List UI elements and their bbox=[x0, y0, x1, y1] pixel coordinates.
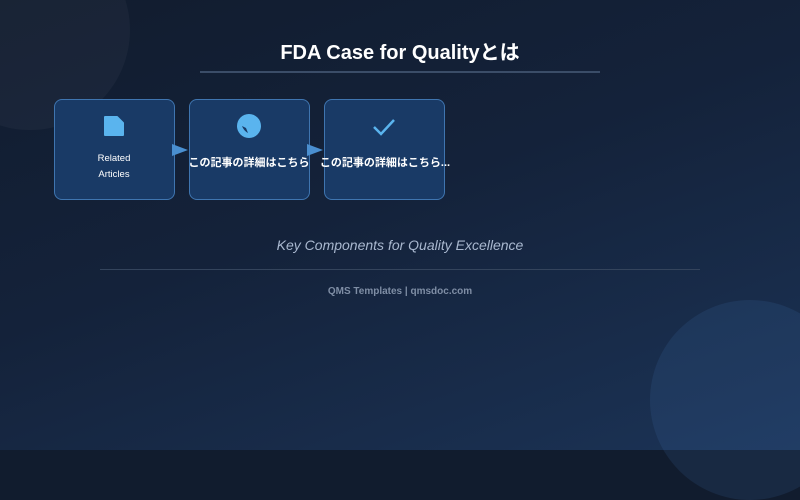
card: related articles bbox=[54, 99, 175, 200]
footer: QMS Templates | qmsdoc.com bbox=[328, 286, 472, 297]
card: 2 bbox=[189, 99, 310, 200]
arrow 1 bbox=[172, 144, 188, 156]
card: 3: この記事の詳細はこちら... bbox=[320, 157, 450, 169]
card: related articles: Related bbox=[98, 153, 130, 164]
icon: globe bbox=[237, 114, 261, 138]
card: related articles: Articles bbox=[98, 169, 130, 180]
card: 2: この記事の詳細はこちら bbox=[188, 157, 310, 169]
subtitle: Key Components for Quality Excellence bbox=[277, 237, 523, 253]
arrow 2 bbox=[307, 144, 323, 156]
icon: document bbox=[104, 116, 124, 136]
icon: check bbox=[373, 119, 395, 136]
card: 3 bbox=[324, 99, 445, 200]
title: FDA Case for Qualityとは bbox=[280, 42, 520, 64]
